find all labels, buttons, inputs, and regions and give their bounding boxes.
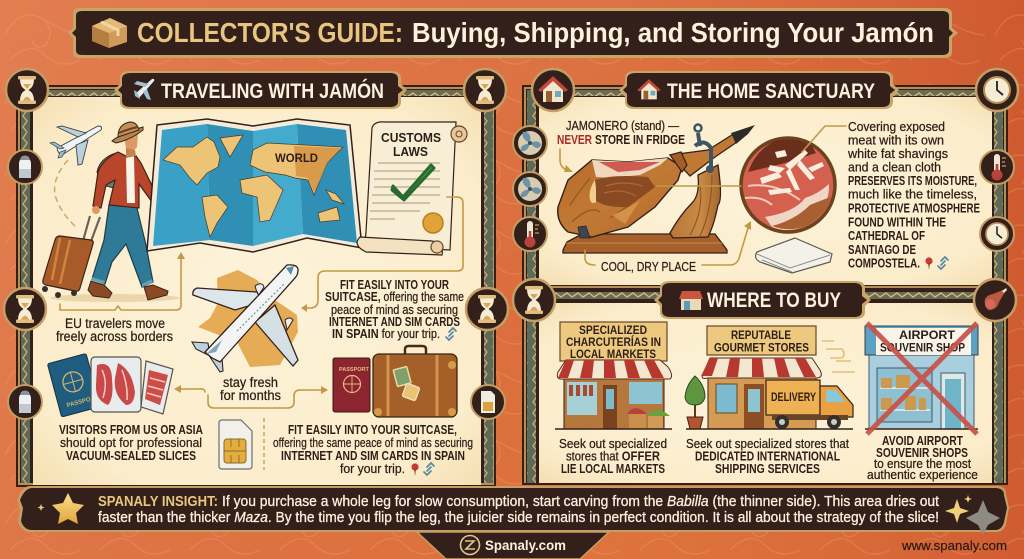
- text: jamonero label: JAMONERO (stand) —: [566, 119, 679, 133]
- text: covering exposed meat: SANTIAGO DE: [848, 242, 916, 257]
- heading: where to buy: [654, 281, 871, 319]
- illustration: folded cloth: [756, 238, 832, 273]
- insight text: If you purchase a whole leg for slow consumption, start carving from the Babilla (the thinner side). This area dries out: [222, 493, 940, 510]
- text: jamonero label: STORE IN FRIDGE: [595, 133, 685, 147]
- store 3: airport shop crossed out: SOUVENIR SHOP: [880, 340, 965, 354]
- text: visitors: VISITORS FROM US OR ASIA: [59, 422, 203, 437]
- text: fit easily lower: INTERNET AND SIM CARDS IN SPAIN: [281, 448, 465, 463]
- text: store 1 description: [559, 437, 667, 476]
- icon: cardboard box: [92, 18, 127, 48]
- text: covering exposed meat: much like the timeless,: [848, 186, 977, 202]
- stand upright: [670, 165, 720, 238]
- text: visitors: [59, 422, 203, 463]
- arrowheads: [174, 252, 328, 394]
- gold seal: [423, 213, 443, 233]
- text: covering exposed meat: FOUND WITHIN THE: [848, 214, 946, 230]
- insight text: SPANALY INSIGHT:: [98, 493, 218, 510]
- insight text: faster than the thicker Maza. By the time you flip the leg, the juicier side remains in perfect condition. It is all about the strategy of the slice!: [98, 509, 939, 526]
- text: fit easily upper: SUITCASE, offering the same: [325, 290, 464, 304]
- text: store 2 description: DEDICATED INTERNATIONAL: [695, 450, 840, 464]
- text: covering exposed meat: and a clean cloth: [848, 160, 941, 174]
- metal clamp: [695, 133, 711, 168]
- illustration: passport and vacuum sealed slices: [47, 353, 173, 417]
- store 1: charcuterias: CHARCUTERÍAS IN: [566, 334, 661, 349]
- panel frame home: [522, 85, 1008, 485]
- heading: traveling with jamon: TRAVELING WITH JAMÓN: [161, 79, 384, 103]
- store 3: airport shop crossed out: AIRPORT: [899, 328, 956, 342]
- text: store 2 description: SHIPPING SERVICES: [715, 462, 820, 476]
- shank and hoof: [670, 133, 737, 176]
- icon: green check: [392, 165, 434, 200]
- ham leg: [558, 158, 682, 237]
- text: cool dry place: COOL, DRY PLACE: [601, 260, 696, 274]
- icon: spanaly logo: [460, 536, 480, 554]
- text: store 3 description: authentic experience: [867, 468, 978, 482]
- heading: home sanctuary: THE HOME SANCTUARY: [667, 80, 875, 103]
- text: store 3 description: [867, 434, 978, 482]
- text: store 1 description: stores that OFFER: [566, 450, 660, 464]
- delivery truck: [766, 380, 853, 429]
- text: visitors: should opt for professional: [60, 435, 202, 450]
- store 1: charcuterias: LOCAL MARKETS: [570, 347, 656, 361]
- text: covering exposed meat: [847, 119, 980, 270]
- text: fit easily upper: FIT EASILY INTO YOUR: [340, 278, 449, 292]
- panel frame left: [16, 85, 496, 487]
- icon: gold star: [52, 493, 84, 524]
- text: covering exposed meat: COMPOSTELA.: [848, 256, 920, 270]
- connector lines home: [560, 126, 846, 265]
- store 2: gourmet with delivery truck: REPUTABLE: [731, 328, 791, 342]
- text: store 2 description: Seek out specialized stores that: [686, 437, 849, 451]
- suitcase: [42, 216, 100, 298]
- shadow: [50, 294, 180, 302]
- arrowheads home: [564, 165, 751, 230]
- stand base: [563, 234, 727, 253]
- text: store 3 description: AVOID AIRPORT: [882, 434, 963, 448]
- text: fit easily lower: FIT EASILY INTO YOUR SUITCASE,: [288, 422, 457, 437]
- insight bar: [17, 486, 1009, 535]
- icon: heading plane: [134, 79, 154, 100]
- title text: Buying, Shipping, and Storing Your Jamón: [412, 17, 934, 48]
- illustration: spain map with plane: [192, 265, 298, 372]
- footer tab: [417, 532, 609, 559]
- title text: [137, 17, 934, 48]
- illustration: customs laws scroll: LAWS: [393, 144, 428, 159]
- boots: [88, 281, 168, 300]
- text: store 1 description: LIE LOCAL MARKETS: [561, 462, 665, 476]
- text: fit easily lower: [273, 422, 473, 476]
- medallions buy: [513, 279, 1016, 321]
- icon: sparkles: [945, 495, 1000, 535]
- text: stay fresh: stay fresh: [223, 375, 278, 390]
- illustration: world map: [147, 119, 362, 252]
- illustration: passport and vacuum sealed slices: PASSPORT: [66, 395, 100, 409]
- delivery truck: DELIVERY: [771, 390, 816, 404]
- red cross out: [867, 323, 977, 434]
- jeans: [92, 204, 153, 287]
- jacket: [93, 152, 158, 208]
- head and hat: [124, 134, 138, 150]
- text: fit easily lower: for your trip.: [340, 461, 405, 476]
- backpack: [97, 153, 124, 188]
- store 1: charcuterias: SPECIALIZED: [579, 323, 647, 337]
- store 2: gourmet with delivery truck: GOURMET STORES: [714, 340, 809, 354]
- text: store 3 description: to ensure the most: [874, 457, 971, 471]
- zoom circle: fat shavings: [741, 138, 835, 232]
- text: covering exposed meat: PRESERVES ITS MOISTURE,: [848, 173, 977, 188]
- text: visitors: VACUUM-SEALED SLICES: [66, 448, 196, 463]
- text: stay fresh: [220, 375, 281, 403]
- illustration: red passport and suitcase: [333, 346, 457, 417]
- text: EU travelers: freely across borders: [56, 329, 173, 344]
- text: jamonero label: [557, 119, 685, 147]
- text: covering exposed meat: Covering exposed: [848, 119, 945, 134]
- illustration: red passport and suitcase: PASSPORT: [339, 367, 369, 373]
- text: EU travelers: EU travelers move: [65, 316, 165, 331]
- text: fit easily lower: offering the same peace of mind as securing: [273, 435, 473, 450]
- insight text: [98, 493, 940, 526]
- text: jamonero label: NEVER: [557, 133, 592, 147]
- title banner: [68, 8, 958, 58]
- store 3: airport shop crossed out: [865, 323, 978, 434]
- medallions left panel: [4, 69, 508, 419]
- icon: sim card: [219, 420, 252, 469]
- heading: home sanctuary: [619, 71, 899, 109]
- text: store 1 description: Seek out specialized: [559, 437, 667, 451]
- footer tab: Spanaly.com: [485, 537, 566, 553]
- illustration: world map: WORLD: [275, 151, 318, 165]
- text: stay fresh: for months: [220, 388, 281, 403]
- icon: small plane with dashed path: [50, 126, 102, 226]
- text: EU travelers: [56, 316, 173, 344]
- title text: COLLECTOR'S GUIDE:: [137, 17, 403, 48]
- band: [670, 152, 687, 172]
- medallions home: [513, 69, 1018, 251]
- connector lines left panel: [60, 197, 463, 408]
- text: covering exposed meat: CATHEDRAL OF: [848, 228, 925, 243]
- panel: where to buy: [513, 279, 1016, 483]
- icon: small shop: [679, 291, 703, 310]
- illustration: customs laws scroll: [357, 122, 467, 255]
- frame where to buy: [527, 285, 1003, 483]
- continents: [163, 135, 344, 237]
- tree: [685, 376, 705, 429]
- illustration: ham on jamonero stand: [558, 124, 755, 253]
- panel: home sanctuary: [513, 69, 1018, 485]
- text: covering exposed meat: white fat shavings: [847, 146, 948, 161]
- heading: where to buy: WHERE TO BUY: [707, 289, 841, 312]
- illustration: traveler with suitcase: [42, 122, 180, 302]
- illustration: customs laws scroll: CUSTOMS: [381, 130, 441, 145]
- text: covering exposed meat: meat with its own: [848, 132, 944, 148]
- store 1: charcuterias: [555, 322, 672, 429]
- store 2: gourmet with delivery truck: [685, 326, 855, 429]
- panel: traveling with jamon: [4, 69, 508, 487]
- text: website url: www.spanaly.com: [901, 538, 1007, 553]
- text: fit easily upper: INTERNET AND SIM CARDS: [329, 315, 460, 329]
- text: store 3 description: SOUVENIR SHOPS: [876, 446, 968, 460]
- text: fit easily upper: [325, 278, 464, 341]
- text: covering exposed meat: PROTECTIVE ATMOSPHERE: [848, 200, 980, 216]
- text: fit easily upper: peace of mind as securing: [331, 303, 458, 317]
- heading: traveling with jamon: [114, 71, 407, 109]
- text: store 2 description: [686, 437, 849, 476]
- text: fit easily upper: IN SPAIN for your trip.: [332, 327, 440, 341]
